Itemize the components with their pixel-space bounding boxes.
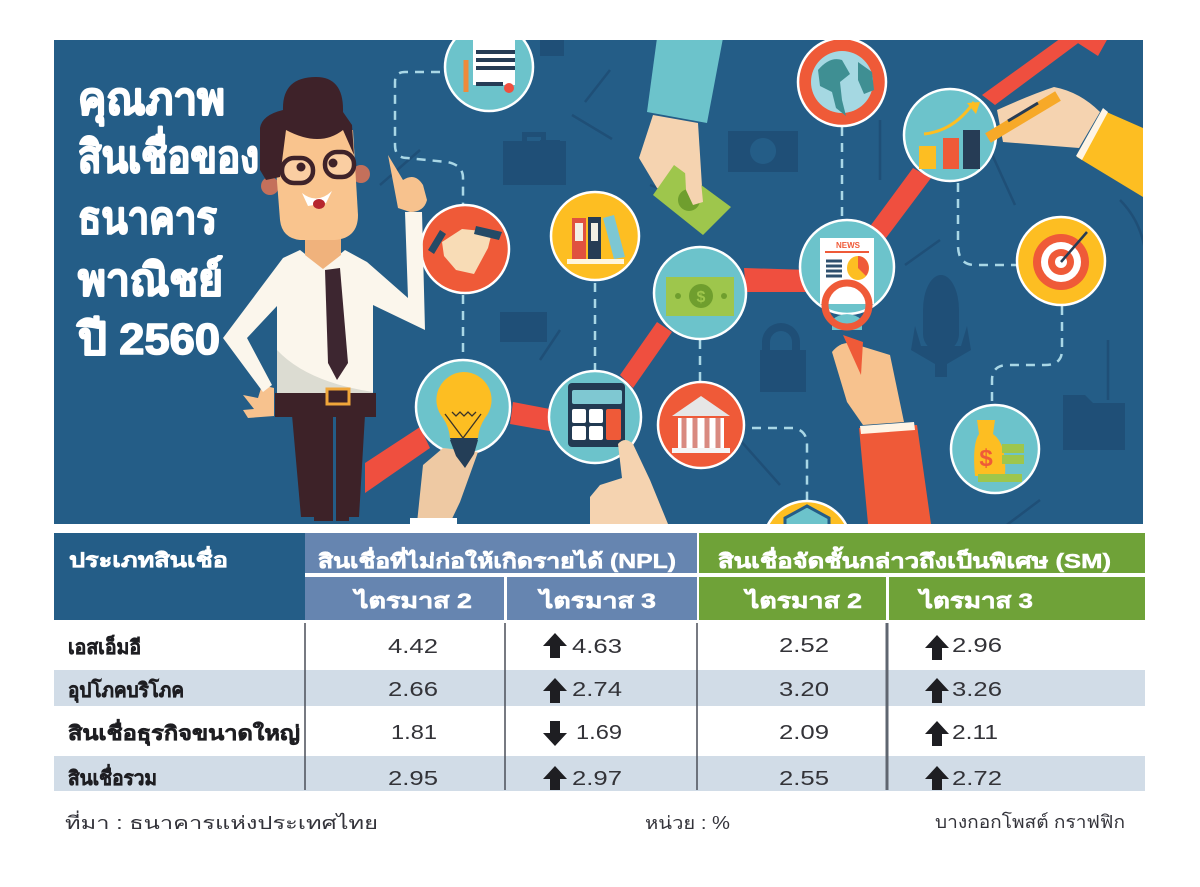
hand with yellow pen (988, 87, 1143, 197)
footer unit: หน่วย : % (645, 813, 730, 833)
row: large business (68, 718, 998, 746)
left hand (243, 385, 274, 418)
circle icon: bank (658, 382, 744, 468)
table body (54, 623, 1145, 791)
row: large business: สินเชื่อธุรกิจขนาดใหญ่ (68, 718, 300, 746)
hair (260, 77, 354, 180)
row: consumer: 2.66 (388, 679, 438, 701)
neck (305, 239, 341, 269)
row: large business: 1.69 (576, 722, 622, 744)
row: SME (68, 633, 1002, 660)
circle icon: binders (551, 192, 639, 280)
row: total: 2.55 (779, 768, 829, 790)
row: consumer: อุปโภคบริโภค (68, 678, 184, 703)
row: SME: 2.52 (779, 635, 829, 657)
circle icon: banknote (654, 247, 746, 339)
title: สินเชื่อของ (78, 126, 259, 182)
face (273, 130, 358, 240)
footer source: ที่มา : ธนาคารแห่งประเทศไทย (65, 810, 378, 833)
glasses (282, 152, 354, 183)
belt (275, 393, 376, 417)
row: large business: 2.09 (779, 722, 829, 744)
circle icon: newspaper: NEWS (836, 241, 861, 250)
circle icon: money bag (951, 405, 1039, 493)
circle icon: newspaper (800, 220, 894, 314)
red growth arrow line (365, 38, 1108, 493)
hand holding money (639, 38, 731, 235)
row: consumer: 3.20 (779, 679, 829, 701)
circle icon: money bag: $ (979, 445, 993, 472)
row: large business: 1.81 (391, 722, 437, 744)
table header: ไตรมาส 3 (918, 588, 1033, 613)
table header: ไตรมาส 3 (537, 588, 656, 613)
row: SME: 2.96 (952, 635, 1002, 657)
title: พาณิชย์ (78, 255, 223, 305)
faint background icons (380, 40, 1145, 530)
mouth (302, 191, 332, 206)
table header: สินเชื่อจัดชั้นกล่าวถึงเป็นพิเศษ (SM) (718, 546, 1111, 573)
row: SME: เอสเอ็มอี (68, 634, 141, 659)
dashed connectors (395, 72, 1062, 500)
row: total: สินเชื่อรวม (68, 763, 157, 790)
hero illustration panel (54, 40, 1143, 524)
circle icon: target (1017, 217, 1105, 305)
table header: ไตรมาส 2 (352, 588, 472, 613)
row: total: 2.95 (388, 768, 438, 790)
row: consumer: 3.26 (952, 679, 1002, 701)
row: consumer (68, 678, 1002, 703)
row: total: 2.97 (572, 768, 622, 790)
title: คุณภาพ (78, 75, 225, 127)
tie (325, 268, 348, 380)
shirt (223, 212, 425, 393)
businessman character (223, 77, 427, 521)
row: total: 2.72 (952, 768, 1002, 790)
table header: ประเภทสินเชื่อ (69, 545, 228, 572)
table header: ไตรมาส 2 (743, 588, 862, 613)
circle icon: calculator (549, 371, 641, 463)
row: large business: 2.11 (952, 722, 998, 744)
circle icon: globe (798, 38, 886, 126)
hand pointing at calculator (590, 440, 668, 524)
circle icon: document (444, 40, 534, 112)
title (76, 75, 259, 364)
row: SME: 4.42 (388, 636, 438, 658)
circle icon: shield (767, 500, 847, 524)
row: SME: 4.63 (572, 636, 622, 658)
hand holding bulb (410, 440, 478, 524)
table header: สินเชื่อที่ไม่ก่อให้เกิดรายได้ (NPL) (318, 546, 676, 573)
row: consumer: 2.74 (572, 679, 622, 701)
row: total (68, 763, 1002, 790)
footer credit: บางกอกโพสต์ กราฟฟิก (935, 811, 1125, 832)
title: ปี 2560 (76, 315, 220, 364)
ears (261, 178, 278, 195)
circle icon: chart (904, 89, 996, 181)
circle icon: handshake (421, 205, 509, 293)
circle icon: light bulb (416, 360, 510, 468)
circle icon: banknote: $ (697, 289, 706, 306)
table header (54, 533, 1145, 620)
title: ธนาคาร (78, 194, 217, 243)
legs (292, 415, 365, 521)
right hand with raised finger (388, 155, 427, 212)
magnifying glass and hand (825, 283, 931, 524)
